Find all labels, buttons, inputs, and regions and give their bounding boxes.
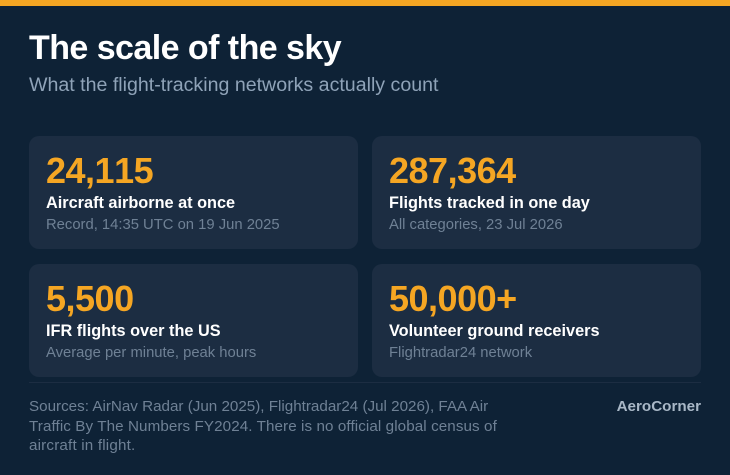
sources note: Traffic By The Numbers FY2024. There is no official global census of: [29, 418, 497, 434]
stat label: IFR flights over the US: [46, 322, 221, 340]
brand wordmark: AeroCorner: [617, 398, 701, 415]
panel: IFR flights: [29, 264, 358, 377]
stat number: 24,115: [46, 150, 153, 191]
stat label: Flights tracked in one day: [389, 194, 590, 212]
panel: ground receivers: [372, 264, 701, 377]
panel: flights tracked: [372, 136, 701, 249]
stat number: 287,364: [389, 150, 516, 191]
panel: aircraft airborne: [29, 136, 358, 249]
stat note: All categories, 23 Jul 2026: [389, 217, 563, 233]
subtitle: What the flight-tracking networks actually count: [29, 74, 438, 96]
stat label: Volunteer ground receivers: [389, 322, 600, 340]
stat number: 50,000+: [389, 278, 517, 319]
top accent bar: [0, 0, 730, 6]
sources note: [29, 398, 497, 454]
title: The scale of the sky: [29, 29, 341, 67]
stat number: 5,500: [46, 278, 134, 319]
stat note: Average per minute, peak hours: [46, 345, 256, 361]
stat note: Record, 14:35 UTC on 19 Jun 2025: [46, 217, 280, 233]
sources note: aircraft in flight.: [29, 437, 135, 454]
stat label: Aircraft airborne at once: [46, 194, 235, 212]
stat note: Flightradar24 network: [389, 345, 532, 361]
sources note: Sources: AirNav Radar (Jun 2025), Flightradar24 (Jul 2026), FAA Air: [29, 398, 488, 415]
